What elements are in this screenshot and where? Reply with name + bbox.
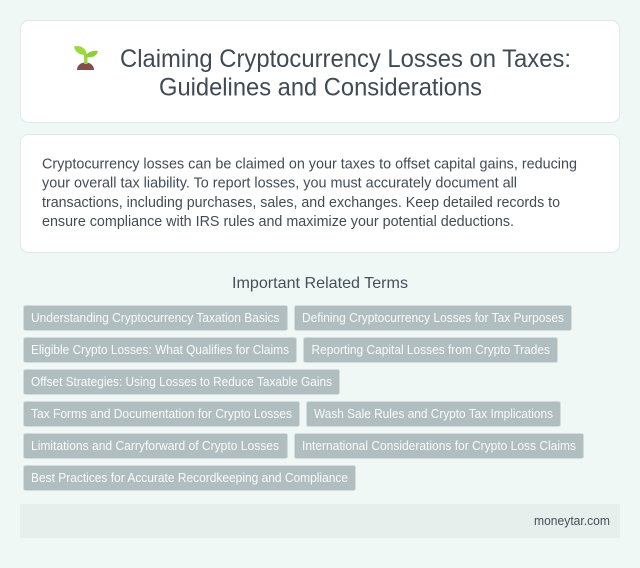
tag: Offset Strategies: Using Losses to Reduce Taxable Gains [31, 375, 332, 389]
footer source text: moneytar.com [534, 514, 610, 528]
tag: Understanding Cryptocurrency Taxation Basics [31, 311, 280, 325]
heading: related terms: Important Related Terms [232, 275, 408, 292]
tag list [24, 306, 584, 490]
tag [24, 338, 296, 362]
title: Guidelines and Considerations [159, 74, 482, 102]
tag [304, 338, 558, 362]
title: Claiming Cryptocurrency Losses on Taxes: [120, 45, 571, 73]
description text [42, 156, 577, 230]
tag: Best Practices for Accurate Recordkeeping and Compliance [31, 471, 348, 485]
tag [294, 306, 572, 330]
tag [24, 306, 288, 330]
description text: transactions, including purchases, sales, and exchanges. Keep detailed records to [42, 194, 560, 211]
footer [20, 504, 620, 538]
description text: ensure compliance with IRS rules and maximize your potential deductions. [42, 213, 514, 230]
panel: title card [20, 20, 620, 122]
title [120, 45, 571, 102]
tag [306, 402, 560, 426]
tag [294, 434, 584, 458]
tag: International Considerations for Crypto Loss Claims [302, 439, 576, 453]
tag [24, 434, 288, 458]
tag: Limitations and Carryforward of Crypto Losses [31, 439, 279, 453]
tag: Reporting Capital Losses from Crypto Trades [312, 343, 550, 357]
tag [24, 402, 300, 426]
tag: Defining Cryptocurrency Losses for Tax Purposes [302, 311, 564, 325]
tag: Eligible Crypto Losses: What Qualifies for Claims [31, 343, 289, 357]
tag: Tax Forms and Documentation for Crypto Losses [31, 407, 292, 421]
panel: description card [20, 134, 620, 252]
tag [24, 466, 356, 490]
icon: seedling [74, 46, 98, 70]
description text: your overall tax liability. To report losses, you must accurately document all [42, 174, 517, 192]
tag: Wash Sale Rules and Crypto Tax Implications [314, 407, 553, 421]
tag [24, 370, 340, 394]
description text: Cryptocurrency losses can be claimed on your taxes to offset capital gains, reducing [42, 156, 577, 172]
